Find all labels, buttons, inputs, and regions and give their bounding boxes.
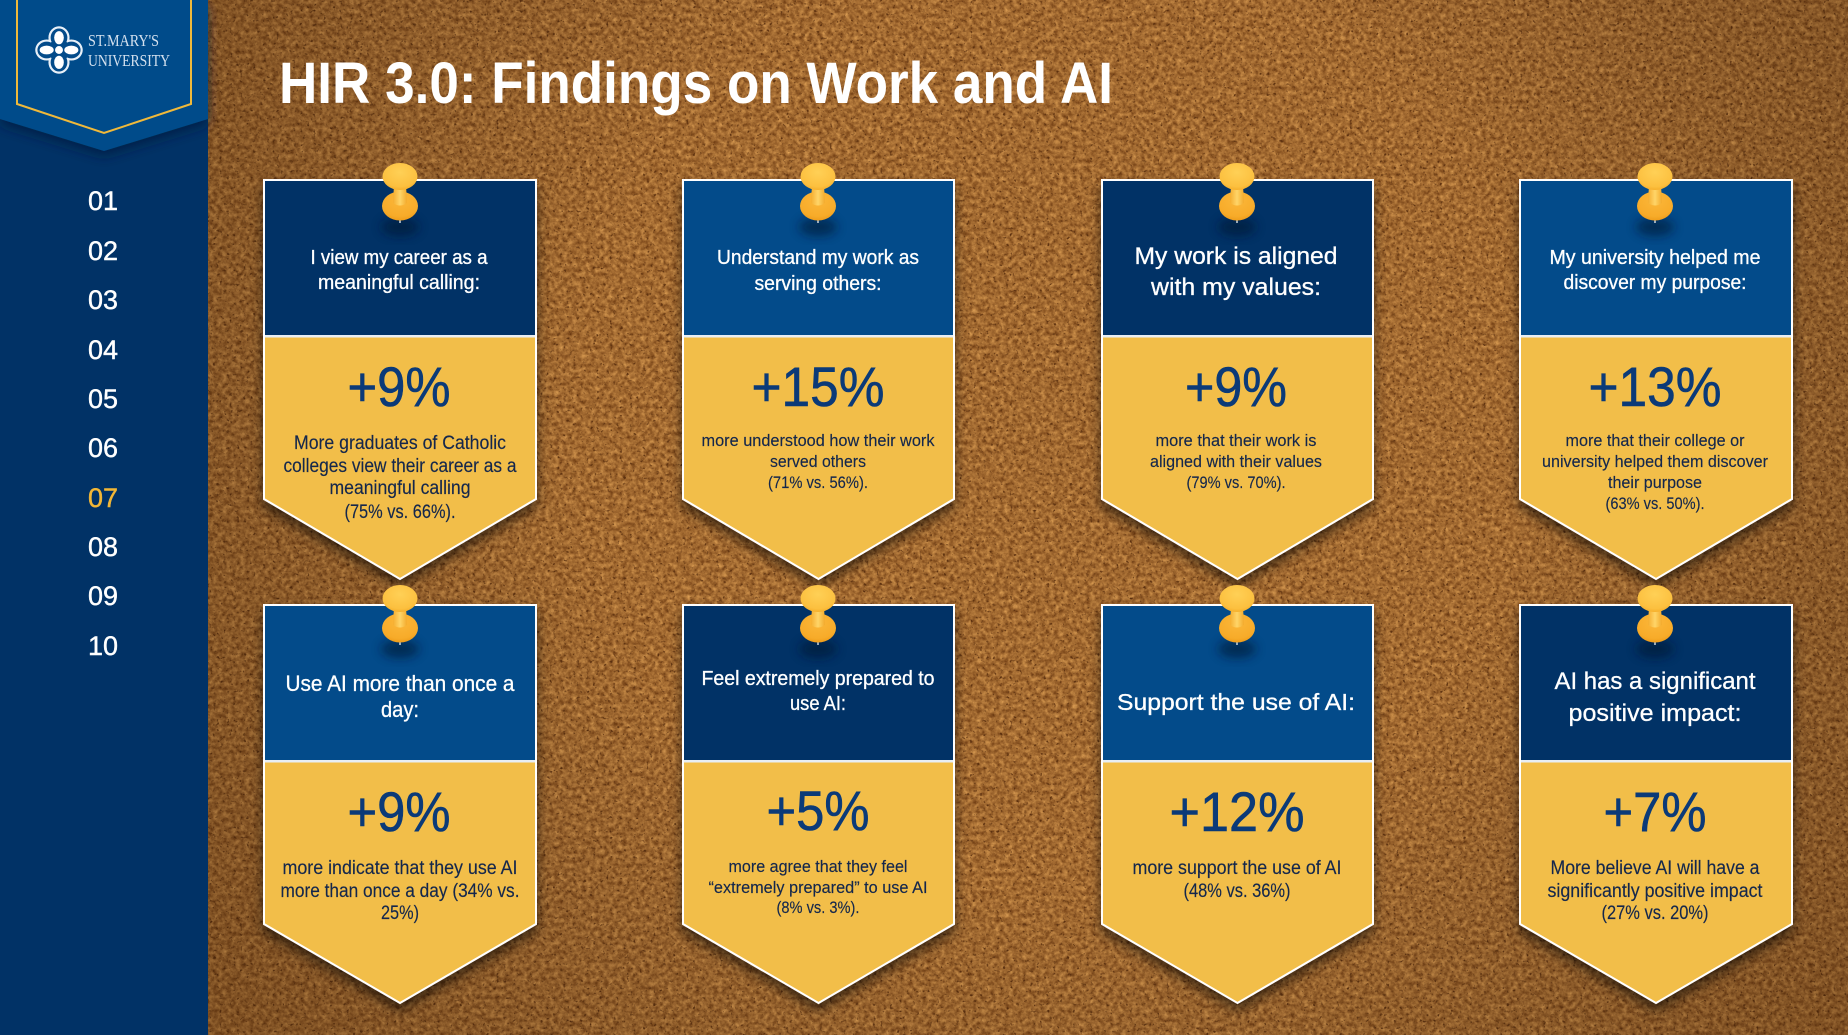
description: 25%): [381, 903, 419, 924]
card 6: prepared to use AI: [683, 605, 954, 1003]
card heading: I view my career as a: [310, 247, 488, 269]
description: More graduates of Catholic: [294, 433, 506, 454]
description: more understood how their work: [702, 431, 935, 450]
push pins: [381, 163, 1674, 658]
section numbers: 04: [88, 335, 118, 365]
description: (63% vs. 50%).: [1606, 494, 1704, 513]
card heading: meaningful calling:: [318, 272, 480, 294]
description: (8% vs. 3%).: [776, 899, 860, 917]
description: served others: [770, 452, 866, 471]
section numbers: 06: [88, 433, 118, 463]
logo wordmark: ST.MARY'S: [88, 31, 159, 50]
statistic: +15%: [752, 355, 884, 418]
description: their purpose: [1608, 473, 1702, 492]
description: more that their work is: [1156, 431, 1316, 450]
logo wordmark: [88, 31, 170, 70]
section numbers: [88, 186, 118, 661]
description: more agree that they feel: [728, 858, 908, 876]
description: (48% vs. 36%): [1184, 881, 1290, 902]
card heading: My university helped me: [1550, 247, 1760, 269]
description: [702, 431, 935, 492]
description: [1548, 858, 1763, 924]
card heading: Feel extremely prepared to: [702, 667, 934, 690]
card heading: [702, 667, 934, 715]
card 2: serving others: [683, 180, 954, 579]
section numbers: 08: [88, 532, 118, 562]
description: [1150, 431, 1322, 492]
description: more than once a day (34% vs.: [280, 881, 520, 902]
section numbers: 03: [88, 285, 118, 315]
description: [1542, 431, 1768, 513]
card heading: day:: [381, 697, 419, 722]
description: (75% vs. 66%).: [344, 502, 456, 523]
card 4: discover purpose: [1520, 180, 1792, 579]
description: [280, 858, 520, 924]
logo wordmark: UNIVERSITY: [88, 51, 170, 70]
section numbers: 05: [88, 384, 118, 414]
card 7: support AI: [1102, 605, 1373, 1003]
description: (71% vs. 56%).: [768, 473, 868, 492]
statistic: +9%: [1185, 355, 1287, 418]
card heading: use AI:: [790, 692, 846, 715]
description: More believe AI will have a: [1550, 858, 1760, 879]
card heading: serving others:: [754, 273, 882, 295]
card heading: [286, 671, 515, 722]
description: significantly positive impact: [1548, 881, 1763, 902]
statistic: +13%: [1588, 355, 1722, 418]
card heading: [1134, 243, 1338, 301]
description: [1132, 858, 1342, 902]
card heading: Support the use of AI:: [1117, 689, 1355, 715]
statistic: +5%: [766, 779, 870, 842]
description: (79% vs. 70%).: [1186, 473, 1286, 492]
card 3: aligned with values: [1102, 180, 1373, 579]
statistic: +7%: [1604, 780, 1706, 843]
card heading: positive impact:: [1568, 700, 1742, 727]
description: meaningful calling: [330, 478, 470, 499]
card heading: discover my purpose:: [1564, 272, 1746, 294]
card heading: Use AI more than once a: [286, 671, 515, 696]
statistic: +9%: [348, 355, 450, 418]
statistic: +12%: [1170, 780, 1304, 843]
card 1: meaningful calling: [264, 180, 536, 579]
logo emblem: [35, 26, 83, 74]
section numbers: 09: [88, 581, 118, 611]
description: [284, 433, 517, 523]
description: “extremely prepared” to use AI: [708, 879, 928, 897]
card heading: [717, 247, 919, 295]
section numbers: 02: [88, 236, 118, 266]
description: colleges view their career as a: [284, 456, 517, 477]
banner with logo: [0, 0, 208, 151]
section numbers: 10: [88, 631, 118, 661]
title: HIR 3.0: Findings on Work and AI: [279, 51, 1113, 116]
description: more that their college or: [1566, 431, 1745, 450]
section numbers: 07: [88, 483, 118, 513]
card 8: positive impact: [1520, 605, 1792, 1003]
statistic: +9%: [348, 780, 450, 843]
description: more indicate that they use AI: [282, 858, 518, 879]
card heading: [310, 247, 488, 294]
card heading: with my values:: [1150, 274, 1321, 301]
card heading: [1550, 247, 1760, 294]
card 5: use AI daily: [264, 605, 536, 1003]
card heading: AI has a significant: [1554, 668, 1756, 695]
card heading: Understand my work as: [717, 247, 919, 269]
card heading: My work is aligned: [1134, 243, 1338, 270]
section numbers: 01: [88, 186, 118, 216]
description: (27% vs. 20%): [1602, 903, 1708, 924]
description: university helped them discover: [1542, 452, 1768, 471]
description: [708, 858, 928, 917]
description: aligned with their values: [1150, 452, 1322, 471]
card heading: [1554, 668, 1756, 727]
sidebar: [0, 0, 208, 1035]
description: more support the use of AI: [1132, 858, 1342, 879]
